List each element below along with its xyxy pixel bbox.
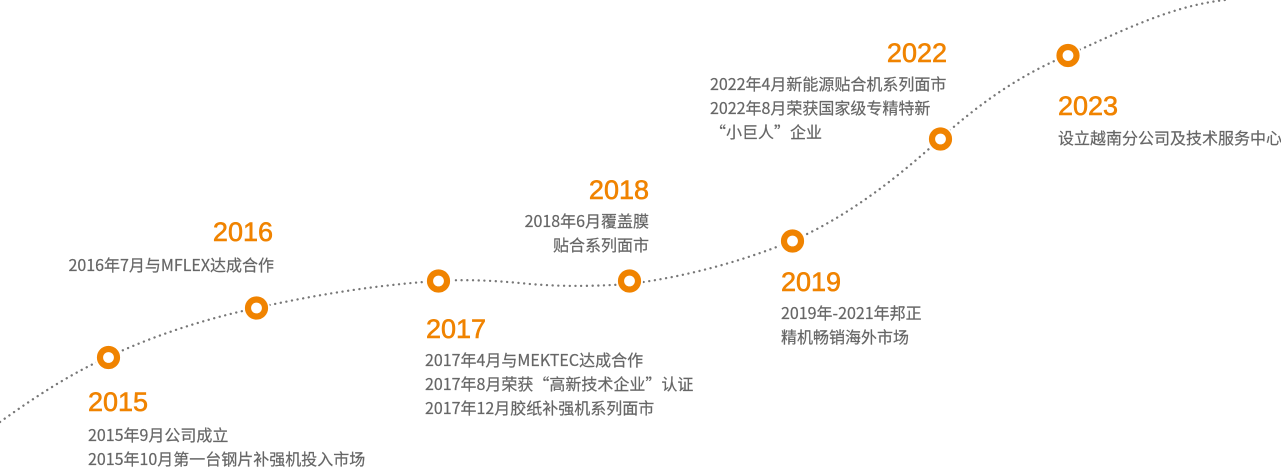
text 2023: 设立越南分公司及技术服务中心 [1058,125,1281,149]
text 2018 [525,208,649,256]
text 2015 [88,422,365,467]
node 2018 [616,268,643,294]
text 2019 [781,300,922,348]
text 2019: 2019年-2021年邦正 [781,300,922,324]
text 2017 [425,347,693,419]
text 2016: 2016年7月与MFLEX达成合作 [68,252,274,276]
text 2017: 2017年4月与MEKTEC达成合作 [425,347,643,371]
text 2022: 2022年8月荣获国家级专精特新 [710,95,930,119]
text 2018: 2018年6月覆盖膜 [525,208,649,232]
text 2018: 贴合系列面市 [553,232,649,256]
node 2017 [425,268,452,294]
text 2017: 2017年8月荣获“高新技术企业”认证 [425,371,693,395]
node 2016 [243,294,270,322]
text 2022: “小巨人”企业 [710,119,822,143]
node 2023 [1054,42,1082,69]
year 2018: 2018 [589,175,649,205]
year 2016: 2016 [213,217,273,247]
node 2019 [779,228,806,254]
year 2017: 2017 [426,314,486,344]
node 2015 [95,344,122,371]
text 2019: 精机畅销海外市场 [781,324,909,348]
text 2022 [710,71,946,143]
text 2017: 2017年12月胶纸补强机系列面市 [425,395,654,419]
year 2023: 2023 [1058,91,1118,121]
text 2022: 2022年4月新能源贴合机系列面市 [710,71,946,95]
year 2015: 2015 [88,387,148,417]
year 2022: 2022 [887,38,947,68]
node 2022 [927,126,954,152]
text 2015: 2015年9月公司成立 [88,422,228,446]
year 2019: 2019 [781,267,841,297]
